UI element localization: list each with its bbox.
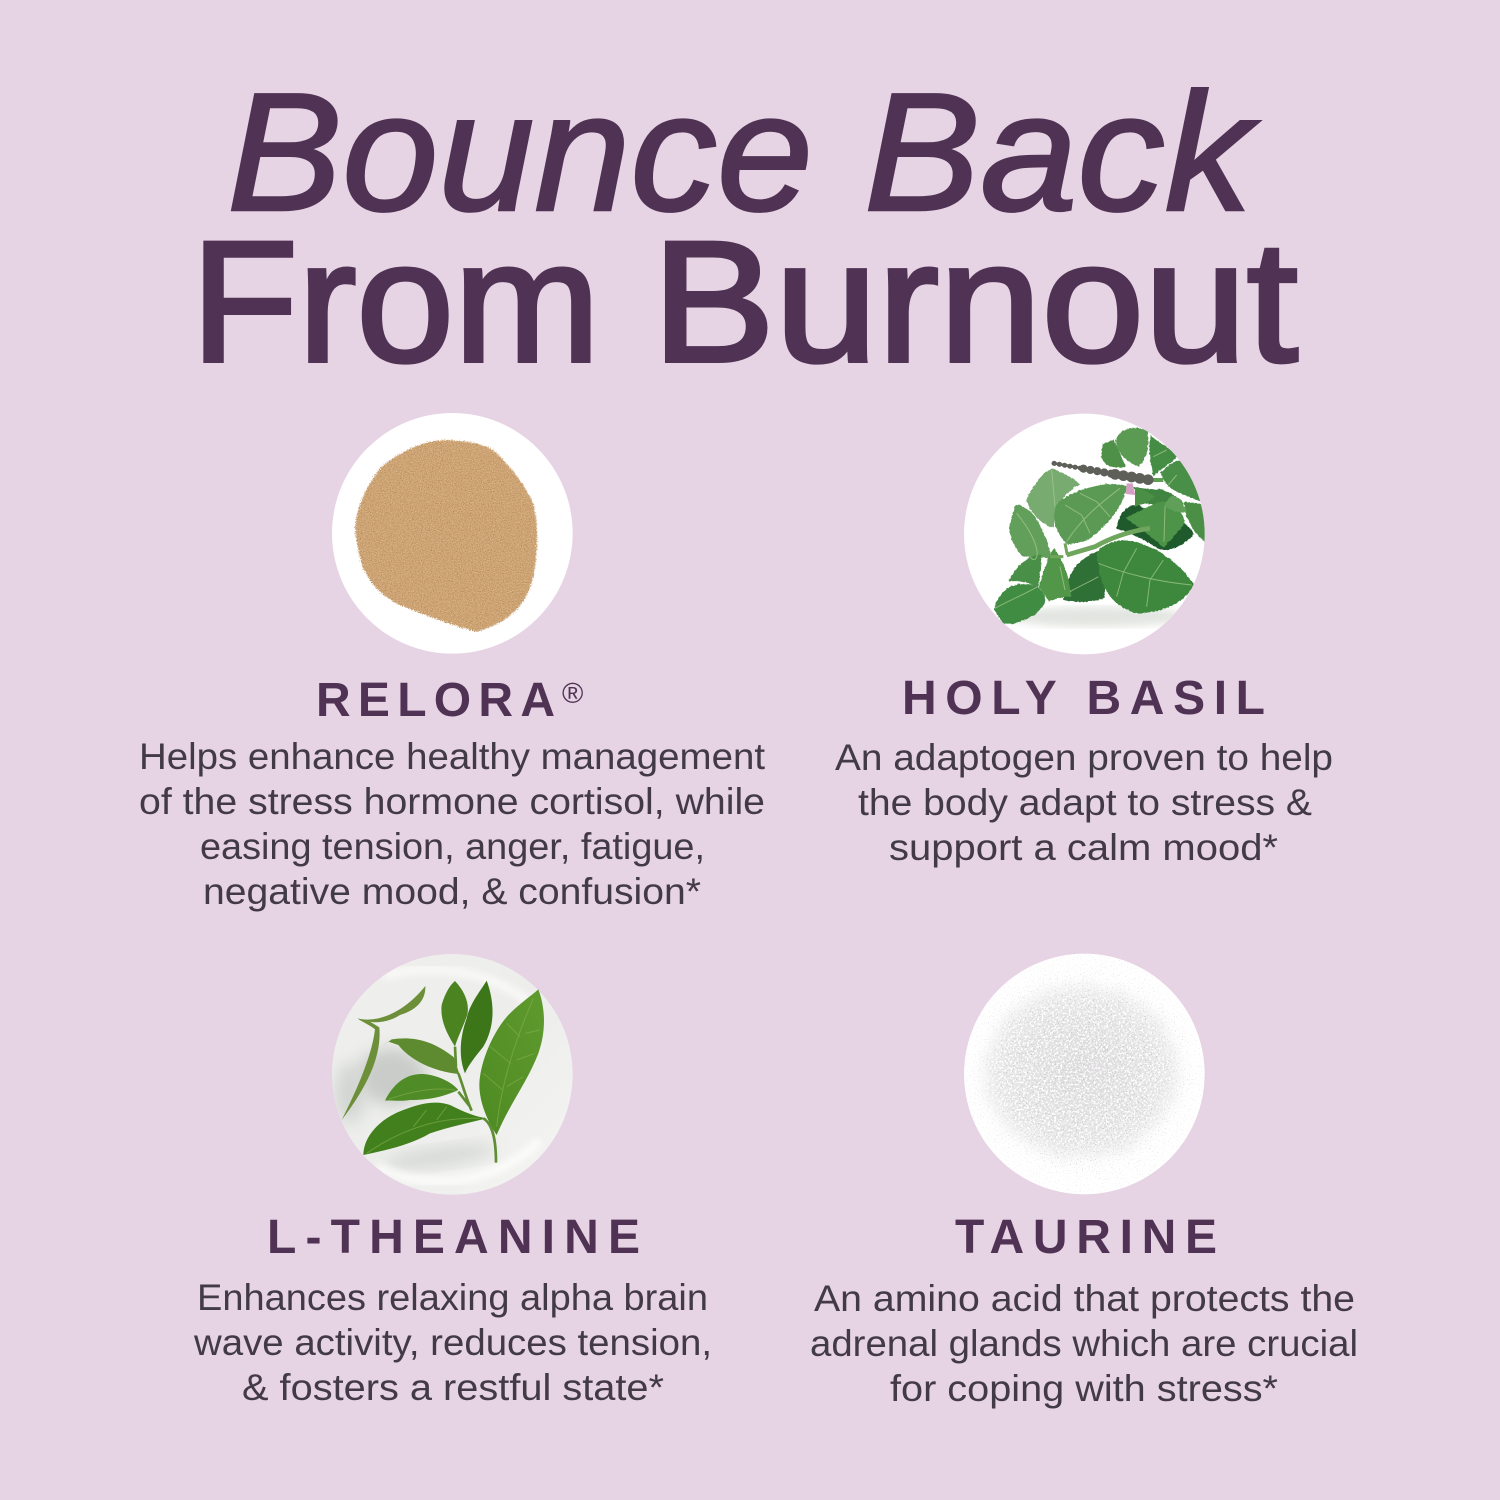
title: Bounce [227, 58, 813, 246]
heading: Holy Basil: HOLY BASIL [902, 672, 1265, 725]
text: L-Theanine description [193, 1276, 712, 1408]
text: Relora description: of the stress hormone cortisol, while [139, 780, 765, 822]
heading: Relora: ® [562, 678, 583, 710]
text: Relora description: Helps enhance healthy management [139, 735, 766, 777]
text: Holy Basil description: the body adapt to stress & [858, 781, 1312, 823]
title: From [191, 206, 600, 398]
panel: Taurine [810, 954, 1358, 1409]
text: Taurine description: adrenal glands which are crucial [810, 1322, 1358, 1364]
text: L-Theanine description: & fosters a restful state* [242, 1366, 664, 1408]
icon: taurine powder [964, 954, 1205, 1194]
text: L-Theanine description: wave activity, reduces tension, [193, 1321, 712, 1363]
icon: holy basil leaves [964, 414, 1207, 654]
title: Back [864, 58, 1260, 246]
text: Taurine description [810, 1277, 1358, 1409]
title [191, 58, 1298, 398]
heading: L-Theanine: L-THEANINE [267, 1211, 640, 1264]
text: L-Theanine description: Enhances relaxing alpha brain [197, 1276, 708, 1318]
text: Taurine description: for coping with stress* [890, 1367, 1278, 1409]
text: Relora description: negative mood, & confusion* [203, 870, 701, 912]
panel: Holy Basil [835, 414, 1333, 868]
text: Relora description: easing tension, anger, fatigue, [200, 825, 705, 867]
panel: Relora [139, 413, 766, 912]
icon: Relora powder [332, 413, 573, 654]
text: Taurine description: An amino acid that protects the [814, 1277, 1355, 1319]
heading: Relora: RELORA [316, 674, 555, 727]
title: Burnout [652, 206, 1298, 398]
text: Holy Basil description: An adaptogen proven to help [835, 736, 1333, 778]
text: Holy Basil description [835, 736, 1333, 868]
icon: tea leaves [332, 954, 573, 1195]
panel: L-Theanine [193, 954, 712, 1408]
heading: Taurine: TAURINE [955, 1211, 1217, 1264]
text: Holy Basil description: support a calm mood* [889, 826, 1278, 868]
text: Relora description [139, 735, 766, 912]
